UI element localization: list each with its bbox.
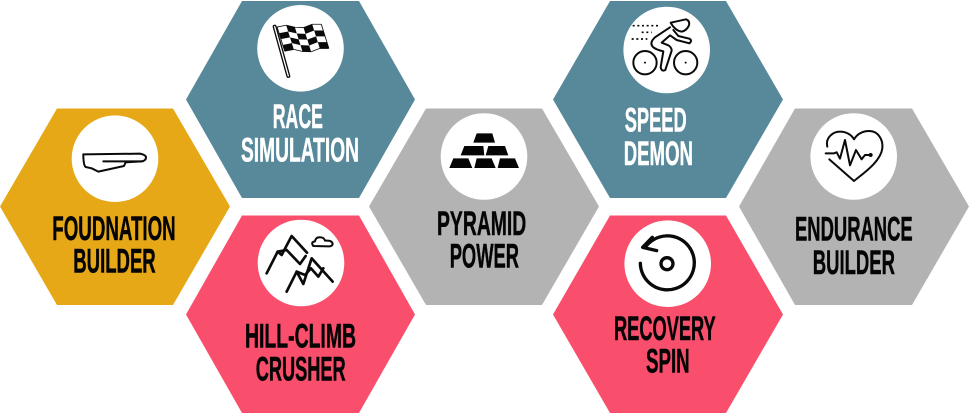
icon circle: hill-climb crusher <box>258 220 344 306</box>
heading: foundation builder: FOUDNATION <box>52 210 176 248</box>
heading: race simulation: SIMULATION <box>241 131 359 169</box>
heading: endurance builder <box>795 211 913 282</box>
heading: race simulation <box>241 98 359 169</box>
heading: recovery spin <box>614 310 716 381</box>
hexagon: pyramid power <box>369 108 599 305</box>
heading: endurance builder: BUILDER <box>813 244 895 282</box>
heading: recovery spin: SPIN <box>646 343 690 381</box>
panel: endurance builder <box>739 108 969 305</box>
icon: heart with pulse <box>826 131 882 181</box>
icon: cyclist <box>632 19 697 74</box>
icon: pointing hand <box>83 154 146 172</box>
icon: checkered flag <box>275 25 328 76</box>
panel: hill-climb crusher <box>186 216 415 413</box>
panel: speed demon <box>553 1 783 198</box>
hexagon: endurance builder <box>739 108 969 305</box>
icon: mountains and cloud <box>267 236 333 292</box>
heading: foundation builder: BUILDER <box>73 243 156 281</box>
icon circle: race simulation <box>257 5 344 92</box>
heading: speed demon: SPEED <box>625 102 687 140</box>
heading: race simulation: RACE <box>273 98 323 136</box>
icon circle: speed demon <box>623 7 710 93</box>
heading: hill-climb crusher: HILL-CLIMB <box>245 318 356 356</box>
panel: pyramid power <box>369 108 599 305</box>
hexagon: recovery spin <box>553 216 783 413</box>
icon: gold bars pyramid <box>449 133 519 168</box>
hexagon: race simulation <box>186 1 415 198</box>
hexagon: hill-climb crusher <box>186 216 415 413</box>
heading: pyramid power: PYRAMID <box>437 205 526 243</box>
heading: pyramid power <box>437 205 526 276</box>
panel: race simulation <box>186 1 415 198</box>
icon circle: endurance builder <box>810 113 897 200</box>
icon: recovery arrow and disc <box>640 236 694 290</box>
heading: speed demon: DEMON <box>624 135 693 173</box>
panel: foundation builder <box>0 108 230 305</box>
heading: hill-climb crusher <box>245 318 356 389</box>
hexagon: foundation builder <box>0 108 230 305</box>
icon circle: recovery spin <box>624 220 711 307</box>
icon circle: foundation builder <box>72 115 158 202</box>
heading: recovery spin: RECOVERY <box>614 310 716 348</box>
heading: speed demon <box>624 102 693 173</box>
hexagon: speed demon <box>553 1 783 198</box>
heading: hill-climb crusher: CRUSHER <box>256 351 346 389</box>
heading: pyramid power: POWER <box>450 238 519 276</box>
heading: foundation builder <box>52 210 176 281</box>
icon circle: pyramid power <box>441 113 527 200</box>
panel: recovery spin <box>553 216 783 413</box>
